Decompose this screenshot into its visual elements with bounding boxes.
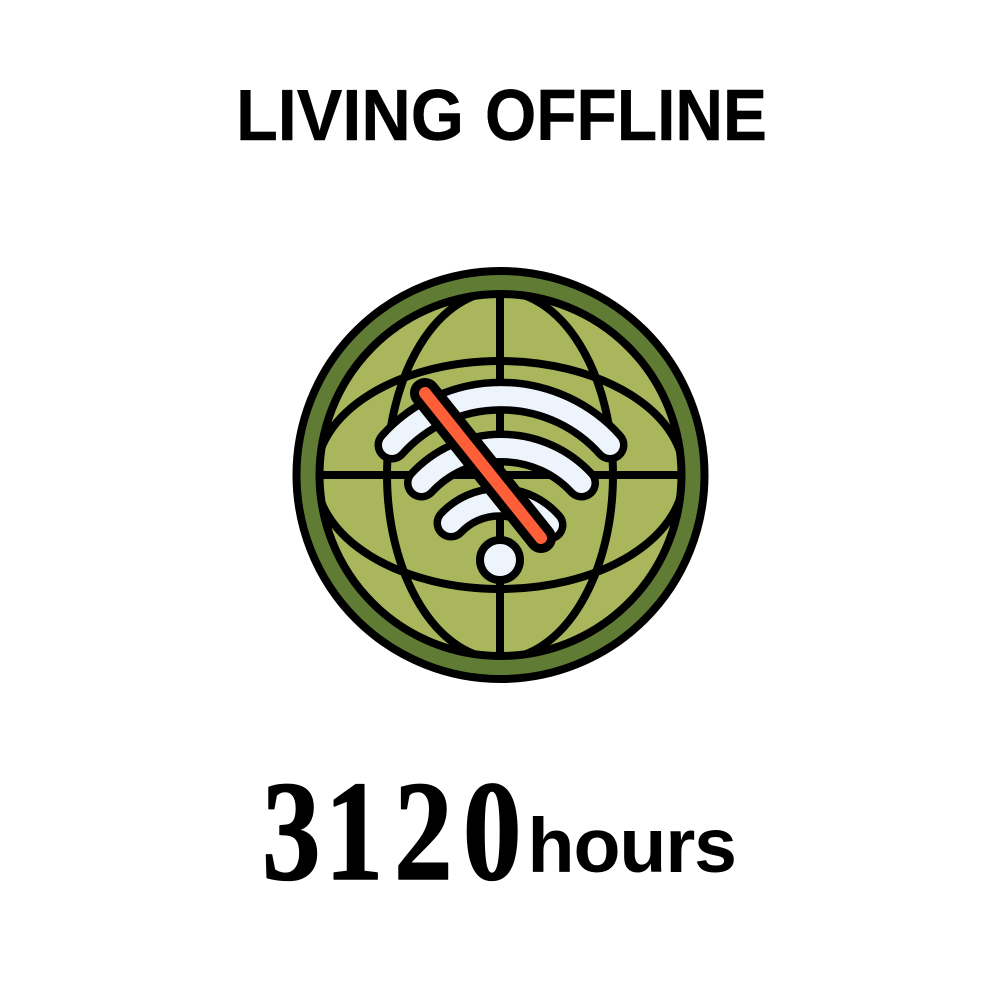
stat unit: hours: [528, 803, 737, 889]
wifi arc: middle: [422, 448, 582, 483]
wifi arc: outer: [392, 396, 610, 445]
globe outer ring: [296, 271, 704, 679]
title: [236, 75, 767, 156]
red slash: [425, 393, 541, 538]
wifi dot: [480, 540, 520, 580]
icon: globe with crossed-out wifi: [296, 271, 704, 679]
wifi arc: inner: [451, 502, 549, 525]
globe face: [320, 294, 682, 656]
title: LIVING: [236, 75, 464, 156]
globe grid lines: [316, 290, 684, 660]
title: OFFLINE: [485, 75, 767, 156]
stat value: 3120: [262, 752, 522, 911]
